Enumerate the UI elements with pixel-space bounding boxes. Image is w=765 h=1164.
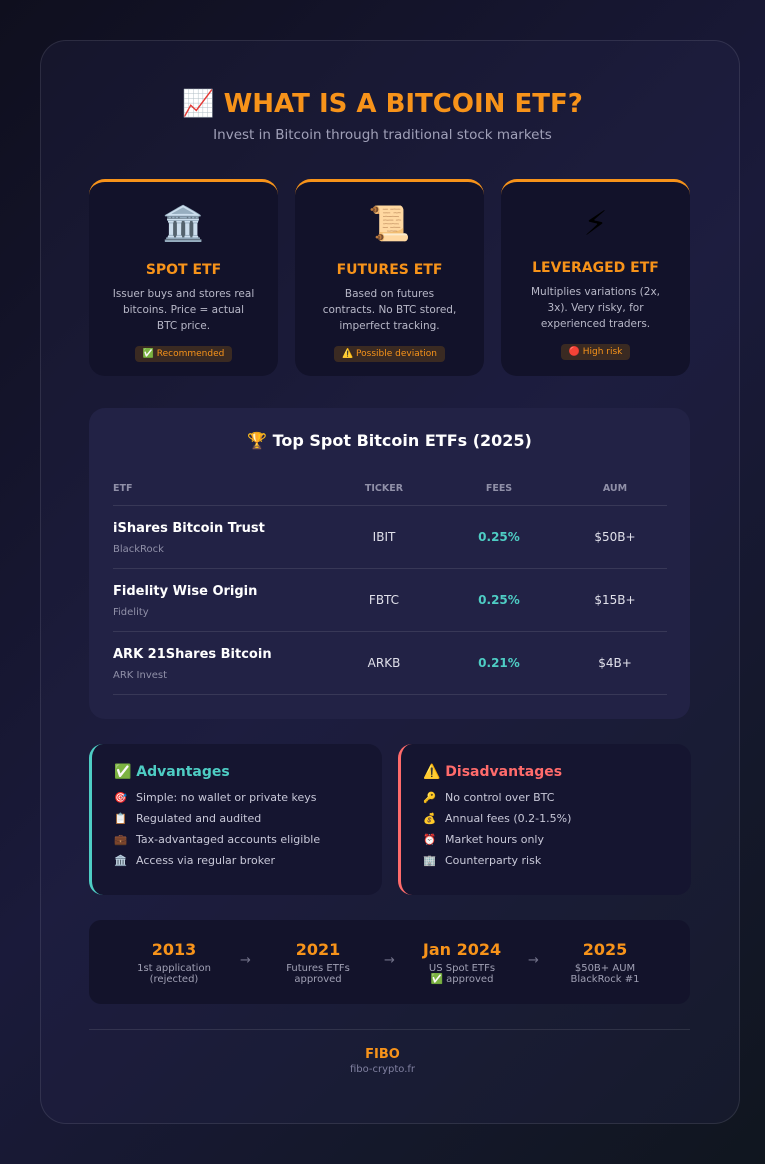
panel: disadvantages: ⚠️ Disadvantages — [423, 764, 562, 780]
table header: AUM — [603, 483, 627, 494]
card: futures ETF: Based on futures — [345, 288, 434, 300]
row: IBIT: $50B+ — [594, 530, 636, 544]
card: spot ETF — [89, 179, 278, 376]
row: ARKB: ARKB — [368, 656, 400, 670]
row: IBIT: IBIT — [373, 530, 395, 544]
row: ARKB: ARK Invest — [113, 670, 167, 681]
card: futures ETF: contracts. No BTC stored, — [323, 304, 456, 316]
panel: advantages — [89, 744, 382, 895]
step 2021: Futures ETFs — [286, 963, 350, 974]
row: FBTC: $15B+ — [594, 593, 636, 607]
step 2021 — [286, 940, 350, 985]
card: spot ETF: bitcoins. Price = actual — [123, 304, 244, 316]
arrow: → — [384, 953, 395, 968]
footer brand: FIBO — [365, 1047, 400, 1062]
panel: disadvantages: Annual fees (0.2-1.5%) — [445, 812, 571, 825]
panel: advantages: 💼 — [114, 834, 127, 846]
card: futures ETF: FUTURES ETF — [337, 262, 442, 278]
panel: disadvantages: ⏰ — [423, 834, 436, 846]
row: ARKB: ARK 21Shares Bitcoin — [113, 647, 272, 662]
panel: disadvantages — [398, 744, 691, 895]
row: IBIT: 0.25% — [478, 530, 520, 544]
card: spot ETF: ✅ Recommended — [143, 349, 224, 359]
step 2013: (rejected) — [150, 974, 198, 985]
step 2021: approved — [294, 974, 342, 985]
step 2013: 1st application — [137, 963, 211, 974]
step 2025: BlackRock #1 — [571, 974, 639, 985]
row: FBTC: 0.25% — [478, 593, 520, 607]
table header: ETF — [113, 483, 132, 494]
panel: disadvantages: 🏢 — [423, 855, 436, 867]
panel: advantages: Simple: no wallet or private keys — [136, 791, 317, 804]
panel: advantages: 🏛️ — [114, 855, 127, 867]
icon: scroll: 📜 — [368, 204, 411, 244]
row: IBIT: BlackRock — [113, 544, 164, 555]
panel: disadvantages: Counterparty risk — [445, 854, 541, 867]
row: FBTC: FBTC — [369, 593, 399, 607]
row: FBTC: Fidelity Wise Origin — [113, 584, 257, 599]
card: futures ETF — [295, 179, 484, 376]
panel: advantages: Access via regular broker — [136, 854, 275, 867]
step 2013 — [137, 940, 211, 985]
card: futures ETF: ⚠️ Possible deviation — [342, 349, 437, 359]
step 2025: $50B+ AUM — [575, 963, 635, 974]
row: FBTC: Fidelity — [113, 607, 149, 618]
card: leveraged ETF: LEVERAGED ETF — [532, 260, 659, 276]
card: spot ETF: SPOT ETF — [146, 262, 221, 278]
table header — [113, 443, 667, 506]
row: ARKB: $4B+ — [598, 656, 632, 670]
panel: disadvantages: 🔑 — [423, 792, 436, 804]
arrow: → — [240, 953, 251, 968]
subtitle: Invest in Bitcoin through traditional stock markets — [213, 127, 552, 143]
icon: bank: 🏛️ — [162, 204, 205, 244]
card: futures ETF: imperfect tracking. — [339, 320, 440, 332]
panel: disadvantages: 💰 — [423, 813, 436, 825]
panel: advantages: Regulated and audited — [136, 812, 261, 825]
step 2025 — [571, 940, 639, 985]
step Jan 2024 — [422, 940, 501, 985]
icon: lightning: ⚡ — [584, 204, 607, 244]
card: leveraged ETF — [501, 179, 690, 376]
step 2025: 2025 — [583, 940, 627, 959]
card: leveraged ETF: Multiplies variations (2x, — [531, 286, 660, 298]
panel: advantages: 📋 — [114, 813, 127, 825]
timeline — [89, 920, 690, 1004]
card: leveraged ETF: 🔴 High risk — [569, 347, 622, 357]
table header: TICKER — [365, 483, 403, 494]
row: ARKB: 0.21% — [478, 656, 520, 670]
card: leveraged ETF: 3x). Very risky, for — [547, 302, 644, 314]
panel: advantages: 🎯 — [114, 792, 127, 804]
row: FBTC — [113, 569, 667, 632]
card: spot ETF: Issuer buys and stores real — [113, 288, 254, 300]
panel: advantages: Tax-advantaged accounts eligible — [136, 833, 320, 846]
step Jan 2024: Jan 2024 — [423, 940, 501, 959]
panel: disadvantages: No control over BTC — [445, 791, 554, 804]
step Jan 2024: US Spot ETFs — [429, 963, 495, 974]
panel: top ETFs table — [89, 408, 690, 719]
card: spot ETF: BTC price. — [157, 320, 210, 332]
panel: advantages: ✅ Advantages — [114, 764, 230, 780]
step 2021: 2021 — [296, 940, 340, 959]
title: 📈 WHAT IS A BITCOIN ETF? — [182, 89, 583, 119]
footer url: fibo-crypto.fr — [350, 1064, 415, 1075]
row: IBIT: iShares Bitcoin Trust — [113, 521, 265, 536]
table header: FEES — [486, 483, 512, 494]
row: ARKB — [113, 632, 667, 695]
row: IBIT — [113, 506, 667, 569]
arrow: → — [528, 953, 539, 968]
step 2013: 2013 — [152, 940, 196, 959]
card: leveraged ETF: experienced traders. — [541, 318, 650, 330]
panel: disadvantages: Market hours only — [445, 833, 544, 846]
step Jan 2024: ✅ approved — [431, 974, 493, 985]
table heading: 🏆 Top Spot Bitcoin ETFs (2025) — [247, 431, 532, 450]
